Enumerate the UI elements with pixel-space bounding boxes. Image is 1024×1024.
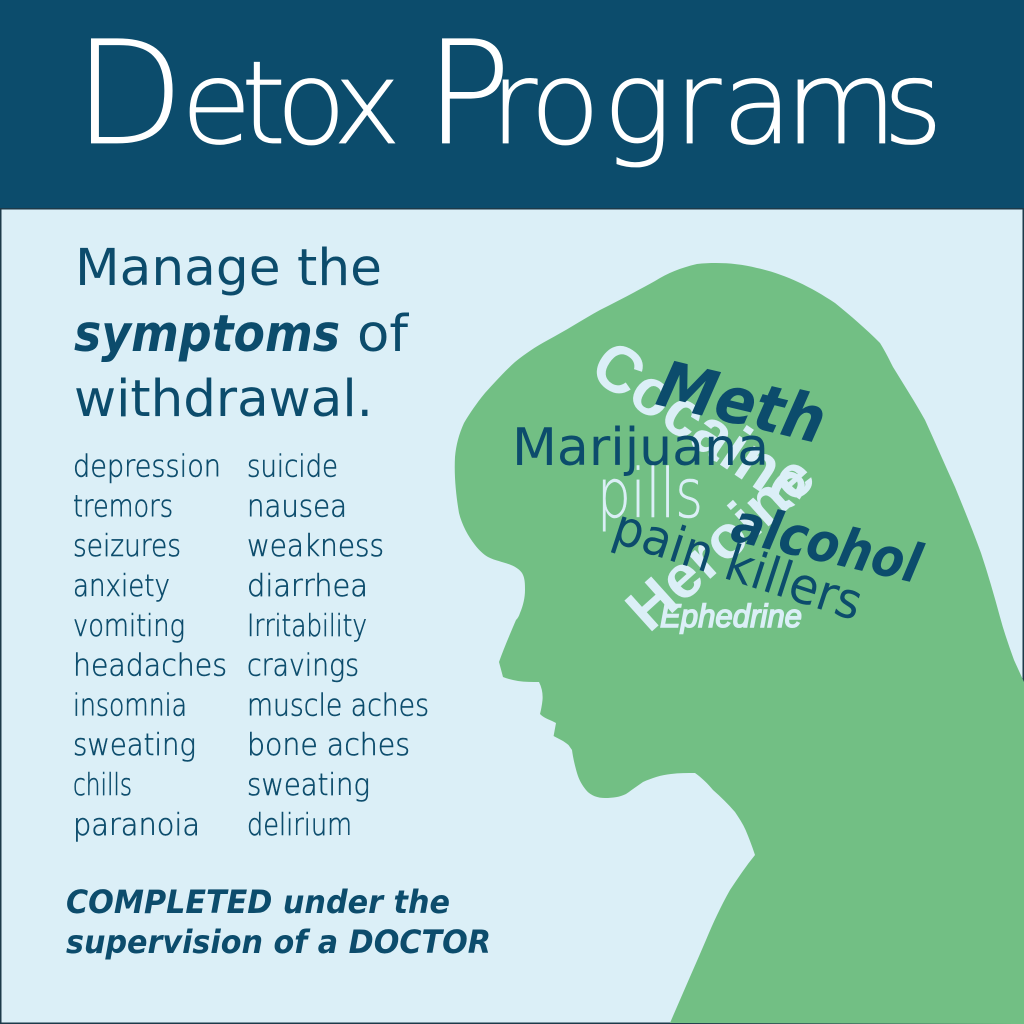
- symptom list: right column: delirium: [247, 808, 352, 843]
- heading: manage the symptoms of withdrawal: of: [357, 305, 409, 364]
- title: Programs: [425, 10, 943, 177]
- title: [74, 10, 943, 177]
- symptom list: left column: paranoia: [73, 808, 200, 843]
- page background panel: [0, 208, 1024, 1024]
- word: Marijuana: Marijuana: [512, 418, 769, 478]
- callout: completed under the supervision of a doctor: supervision of a DOCTOR: [66, 923, 491, 961]
- heading: manage the symptoms of withdrawal: [74, 239, 409, 429]
- header banner: [0, 0, 1024, 208]
- word: Cocaine: Cocaine: [579, 325, 826, 525]
- heading: manage the symptoms of withdrawal: withdrawal.: [74, 370, 373, 429]
- symptom list: right column: sweating: [247, 768, 370, 803]
- symptom list: left column: depression: [73, 450, 221, 484]
- word: alcohol: alcohol: [726, 491, 929, 596]
- symptom list: left column: chills: [73, 768, 132, 803]
- symptom list: left column: insomnia: [73, 688, 187, 724]
- symptom list: right column: cravings: [247, 648, 359, 684]
- symptom list: right column: Irritability: [247, 609, 367, 644]
- symptom list: left column: [73, 450, 227, 843]
- title: Detox: [74, 10, 401, 177]
- word: Meth: Meth: [650, 348, 833, 459]
- word: pills: pills: [597, 455, 703, 534]
- word cloud of drugs: [512, 325, 929, 644]
- symptom list: right column: diarrhea: [247, 569, 368, 604]
- symptom list: right column: suicide: [247, 450, 338, 484]
- symptom list: left column: anxiety: [73, 569, 170, 604]
- symptom list: left column: seizures: [73, 529, 181, 564]
- symptom list: left column: sweating: [73, 728, 196, 763]
- symptom list: right column: [247, 450, 429, 843]
- word: Heroine: Heroine: [613, 441, 827, 644]
- head silhouette: [455, 263, 1024, 1024]
- symptom list: right column: muscle aches: [247, 688, 429, 724]
- symptom list: right column: bone aches: [247, 728, 410, 763]
- symptom list: left column: headaches: [73, 648, 227, 684]
- callout: completed under the supervision of a doctor: [66, 883, 491, 961]
- callout: completed under the supervision of a doctor: COMPLETED under the: [66, 883, 450, 921]
- heading: manage the symptoms of withdrawal: Manage the: [75, 239, 382, 298]
- word: pain killers: pain killers: [606, 497, 870, 632]
- word: Ephedrine: Ephedrine: [660, 598, 802, 634]
- symptom list: right column: weakness: [247, 529, 384, 564]
- symptom list: left column: tremors: [73, 490, 173, 524]
- symptom list: right column: nausea: [247, 490, 347, 524]
- symptom list: left column: vomiting: [73, 609, 185, 644]
- heading: manage the symptoms of withdrawal: symptoms: [74, 305, 340, 364]
